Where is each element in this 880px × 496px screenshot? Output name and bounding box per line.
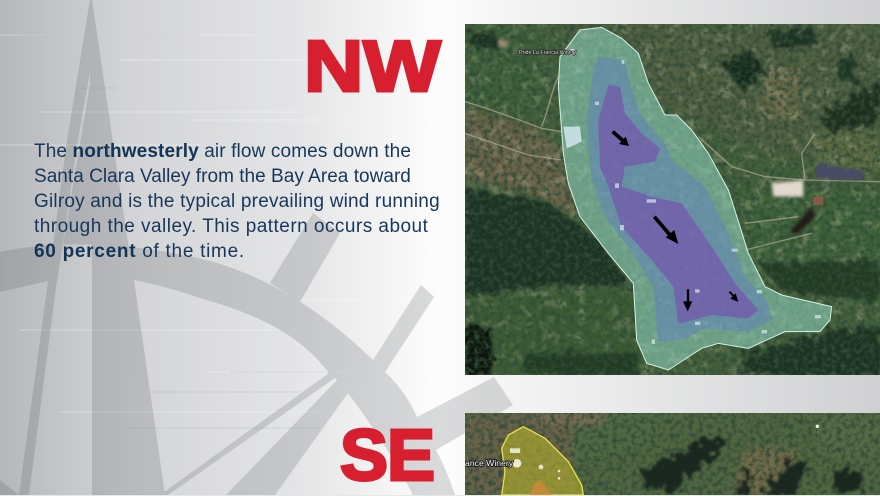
- building clusters: [498, 38, 863, 233]
- map label: winery: Pride La Francia Winery: [519, 50, 576, 56]
- text block: northwesterly description: Santa Clara Valley from the Bay Area toward: [34, 166, 411, 187]
- text block: northwesterly description: Gilroy and is the typical prevailing wind running: [34, 191, 440, 212]
- compass rose watermark: [0, 0, 513, 495]
- text block: northwesterly description: [34, 141, 440, 262]
- wind contours: [558, 27, 832, 370]
- text block: northwesterly description: through the valley. This pattern occurs about: [34, 216, 428, 237]
- text block: northwesterly description: The northwesterly air flow comes down the: [34, 141, 411, 162]
- heading: SE: SE: [340, 416, 434, 496]
- contour: yellow plume: [502, 427, 583, 495]
- arrows: wind direction: [613, 132, 738, 311]
- text block: northwesterly description: 60 percent of the time.: [34, 241, 245, 262]
- map: NW wind aerial with contours: [465, 24, 880, 375]
- heading: NW: NW: [304, 27, 441, 107]
- map: SE wind aerial with contours: [465, 413, 880, 495]
- map label: winery: ance Winery: [465, 458, 514, 468]
